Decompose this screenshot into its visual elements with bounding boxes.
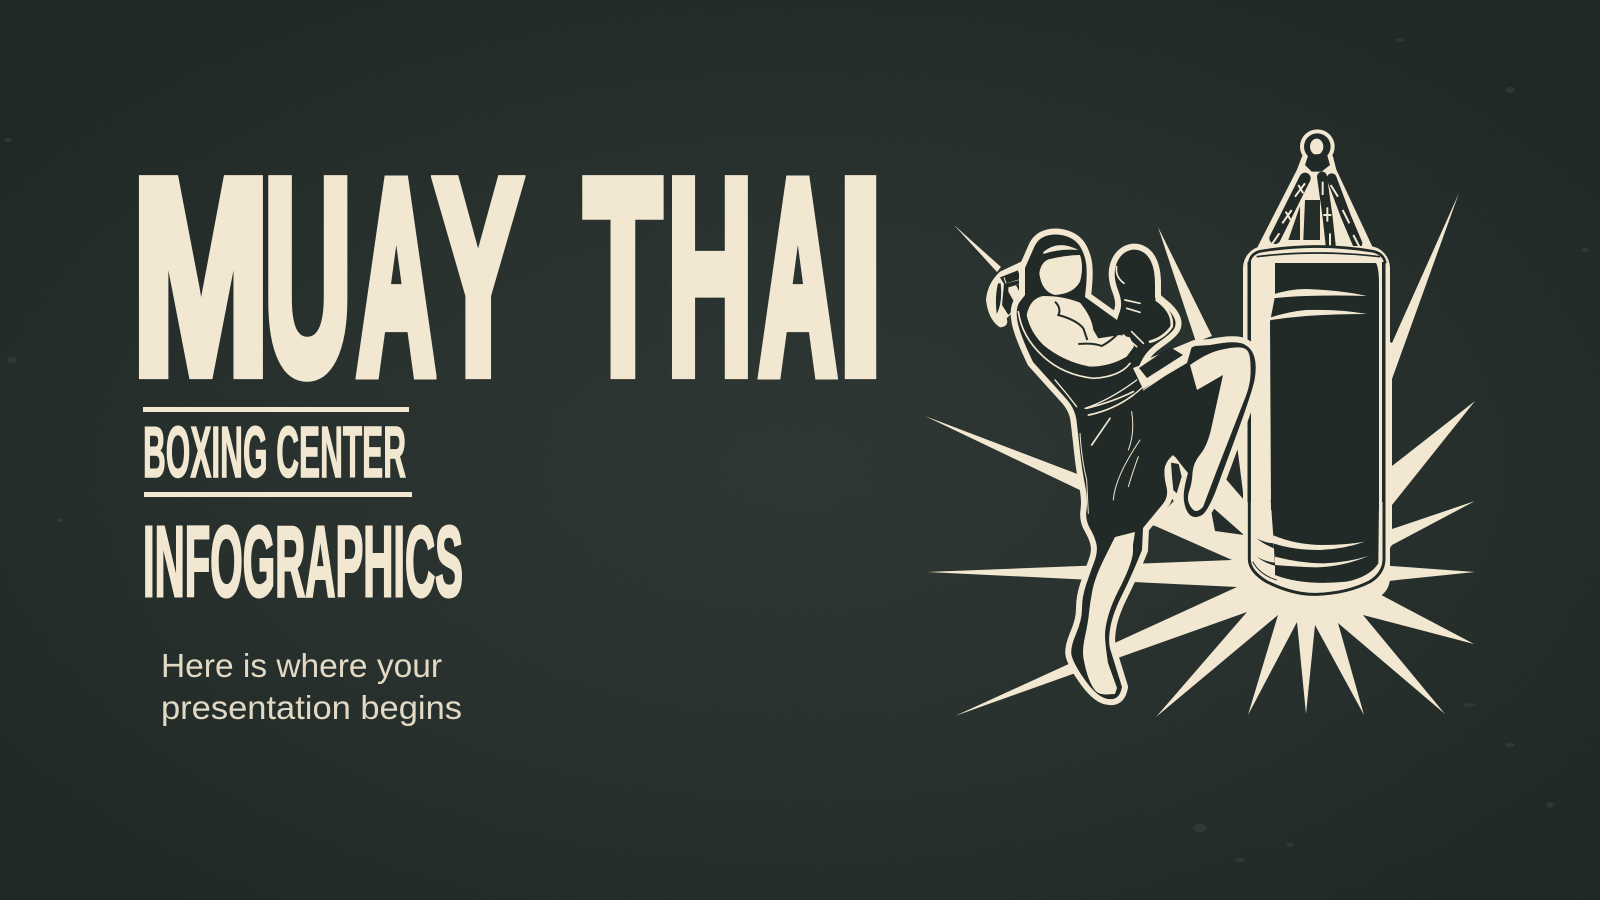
illustration and subtitle layer: INFOGRAPHICS [143,506,463,618]
standing leg [1083,532,1135,695]
title: I [838,123,883,433]
shorts highlights [1080,365,1186,513]
punching bag [1243,246,1390,600]
subtitle block with rules [143,407,412,497]
illustration: fighter kicking a heavy bag [925,129,1475,717]
title: U [264,123,351,433]
tagline text [161,647,462,726]
belt band [1133,346,1192,389]
kicking leg [1188,347,1251,511]
title: T [584,123,661,433]
starburst [925,193,1475,717]
muscle lines [1055,302,1117,346]
title: M [132,123,270,433]
title [132,123,883,433]
fighter silhouette [1017,234,1256,699]
torso and arm [1027,296,1134,367]
tail of headband [986,261,1031,327]
title: Y [434,123,522,433]
headband top [1043,245,1078,254]
tagline text: presentation begins [161,689,462,726]
tagline text: Here is where your [161,647,442,684]
title: H [667,123,753,433]
title: A [760,128,835,429]
fighter [986,234,1256,699]
gear highlights [1018,253,1172,415]
foot gap [1167,457,1186,505]
illustration and subtitle layer: BOXING CENTER [143,412,406,493]
chains and ring [1258,129,1372,248]
face [1039,255,1082,295]
title: A [358,128,434,429]
head, torso and glove details [1018,245,1172,415]
